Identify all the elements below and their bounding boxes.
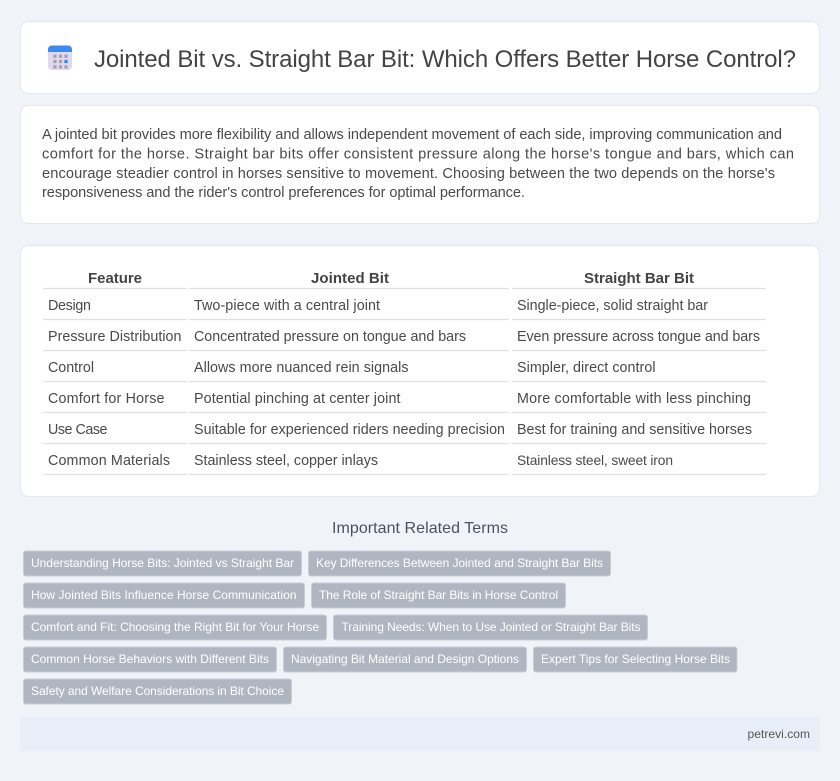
tag: Key Differences Between Jointed and Straight Bar Bits: [316, 556, 603, 570]
text block: introduction paragraph: comfort for the horse. Straight bar bits offer consistent pressure along the horse's tongue and bars, which can: [42, 146, 794, 162]
table row: use case: Suitable for experienced riders needing precision: [194, 422, 505, 438]
table row: design: [48, 298, 708, 314]
table row: pressure distribution: Concentrated pressure on tongue and bars: [194, 329, 466, 345]
tag: [24, 551, 302, 576]
footer: [20, 717, 820, 751]
table header row: Straight Bar Bit: [584, 270, 694, 287]
table row: design: Design: [48, 298, 91, 314]
table row: comfort for horse: Potential pinching at center joint: [194, 391, 401, 407]
table row: control: Simpler, direct control: [517, 360, 656, 376]
icon: calendar: [48, 46, 72, 70]
table row: common materials: Stainless steel, sweet iron: [517, 453, 673, 468]
tag: Common Horse Behaviors with Different Bits: [31, 652, 269, 666]
footer source text: petrevi.com: [748, 727, 810, 741]
tag: Training Needs: When to Use Jointed or Straight Bar Bits: [342, 620, 640, 634]
table row: control: [48, 360, 656, 376]
table row: use case: [48, 422, 752, 438]
tag: [334, 615, 648, 640]
panel: header: [20, 22, 820, 94]
tag: [24, 647, 276, 672]
table row: design: Two-piece with a central joint: [194, 298, 380, 314]
text block: introduction paragraph: encourage steadier control in horses sensitive to movement. Choosing between the two depends on the horse's: [42, 166, 775, 182]
text block: introduction paragraph: [42, 127, 794, 201]
tag: The Role of Straight Bar Bits in Horse Control: [319, 588, 558, 602]
tag: [24, 615, 326, 640]
table row: pressure distribution: [48, 329, 760, 345]
panel: introduction: [20, 106, 820, 224]
tag: How Jointed Bits Influence Horse Communication: [31, 588, 296, 602]
table row: comfort for horse: Comfort for Horse: [48, 391, 165, 407]
tag: [534, 647, 737, 672]
tag: Understanding Horse Bits: Jointed vs Straight Bar: [31, 556, 294, 570]
tag: [24, 679, 292, 704]
table row: control: Control: [48, 360, 94, 376]
table header row: Jointed Bit: [311, 270, 389, 287]
table row: pressure distribution: Pressure Distribution: [48, 329, 182, 345]
tag: [24, 583, 304, 608]
panel: comparison table: [20, 246, 820, 496]
tag: [312, 583, 566, 608]
tag: [308, 551, 610, 576]
table row: common materials: Stainless steel, copper inlays: [194, 453, 378, 469]
table header row: [88, 270, 694, 287]
text block: introduction paragraph: A jointed bit provides more flexibility and allows independent movement of each side, improving communication and: [42, 127, 782, 143]
table row: comfort for horse: [48, 391, 751, 407]
table row: pressure distribution: Even pressure across tongue and bars: [517, 329, 760, 345]
table header row: Feature: [88, 270, 142, 287]
tag: Comfort and Fit: Choosing the Right Bit for Your Horse: [31, 620, 319, 634]
table row: common materials: [48, 453, 673, 469]
text block: introduction paragraph: responsiveness and the rider's control preferences for optimal performance.: [42, 185, 525, 201]
table row: common materials: Common Materials: [48, 453, 170, 469]
heading: important related terms: Important Related Terms: [332, 520, 508, 537]
tag: Safety and Welfare Considerations in Bit Choice: [31, 684, 284, 698]
tag: Navigating Bit Material and Design Options: [291, 652, 519, 666]
panel: related term tags: [24, 551, 737, 704]
table row: use case: Use Case: [48, 422, 108, 438]
title: Jointed Bit vs. Straight Bar Bit: Which Offers Better Horse Control?: [94, 46, 796, 73]
tag: Expert Tips for Selecting Horse Bits: [541, 652, 730, 666]
table row: use case: Best for training and sensitive horses: [517, 422, 752, 438]
tag: [284, 647, 526, 672]
table row: control: Allows more nuanced rein signals: [194, 360, 408, 376]
table row: comfort for horse: More comfortable with less pinching: [517, 391, 751, 407]
table row: design: Single-piece, solid straight bar: [517, 298, 708, 314]
